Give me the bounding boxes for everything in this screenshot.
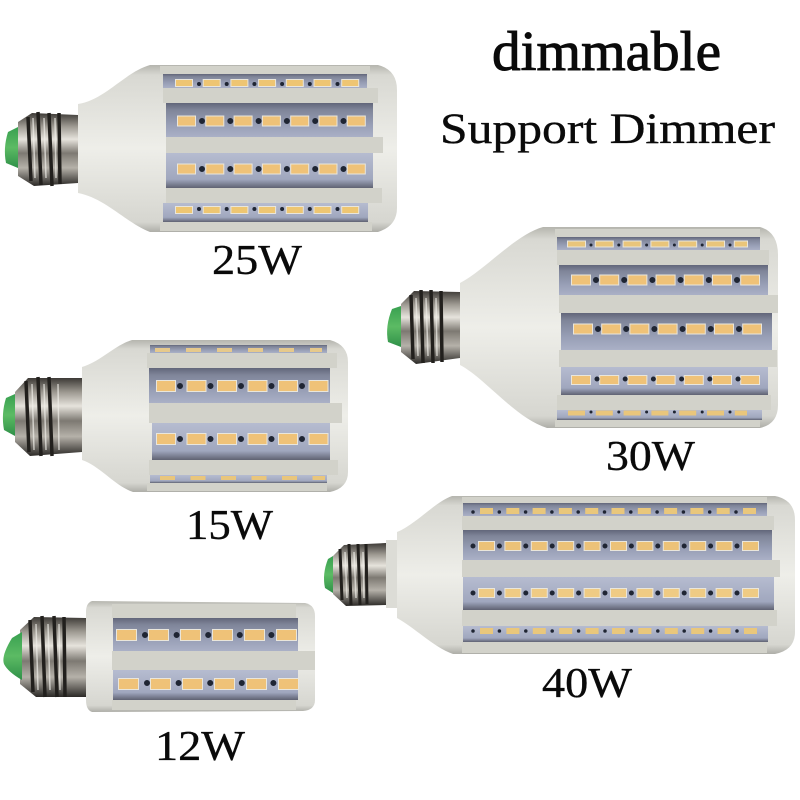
LED row 4 <box>150 475 327 483</box>
LED row 1 <box>463 503 767 516</box>
LED row 1 <box>113 618 298 651</box>
LED row 5 <box>557 410 762 420</box>
lamp housing <box>82 340 348 492</box>
housing ribs <box>555 229 778 427</box>
housing ribs <box>462 497 780 653</box>
LED row 2 <box>559 265 768 295</box>
icon: screw base <box>3 377 82 456</box>
housing ribs <box>147 353 342 491</box>
icon: screw base <box>5 112 78 186</box>
LED row 2 <box>166 103 373 137</box>
lamp housing <box>86 601 315 712</box>
housing ribs <box>160 66 383 231</box>
label: 12W: 12W <box>155 724 245 770</box>
label: 40W: 40W <box>542 661 632 707</box>
LED row 1 <box>163 74 367 88</box>
LED row 3 <box>463 577 774 610</box>
label: 15W: 15W <box>186 503 273 549</box>
lamp housing <box>460 227 778 428</box>
LED row 3 <box>166 153 373 188</box>
icon: screw base <box>324 540 398 608</box>
bulb: 30W <box>387 227 778 428</box>
LED row 4 <box>163 203 368 222</box>
LED row 1 <box>557 237 760 250</box>
title: dimmable: dimmable <box>492 21 721 83</box>
housing ribs <box>112 604 315 710</box>
LED row 3 <box>152 423 330 460</box>
label: 30W: 30W <box>606 434 695 480</box>
LED row 2 <box>149 368 330 403</box>
subtitle: Support Dimmer: Support Dimmer <box>440 106 775 153</box>
icon: screw base <box>3 616 86 697</box>
bulb: 40W <box>324 496 795 654</box>
LED row 1 <box>150 345 327 353</box>
lamp housing <box>397 496 795 654</box>
LED row 2 <box>113 670 299 700</box>
bulb: 25W <box>5 65 397 232</box>
bulb: 12W <box>3 601 315 712</box>
LED row 4 <box>463 626 768 642</box>
icon: screw base <box>387 290 460 364</box>
bulb: 15W <box>3 340 348 492</box>
LED row 3 <box>561 313 772 350</box>
label: 25W: 25W <box>212 238 302 284</box>
LED row 2 <box>463 530 772 560</box>
lamp housing <box>78 65 397 232</box>
LED row 4 <box>561 367 768 395</box>
